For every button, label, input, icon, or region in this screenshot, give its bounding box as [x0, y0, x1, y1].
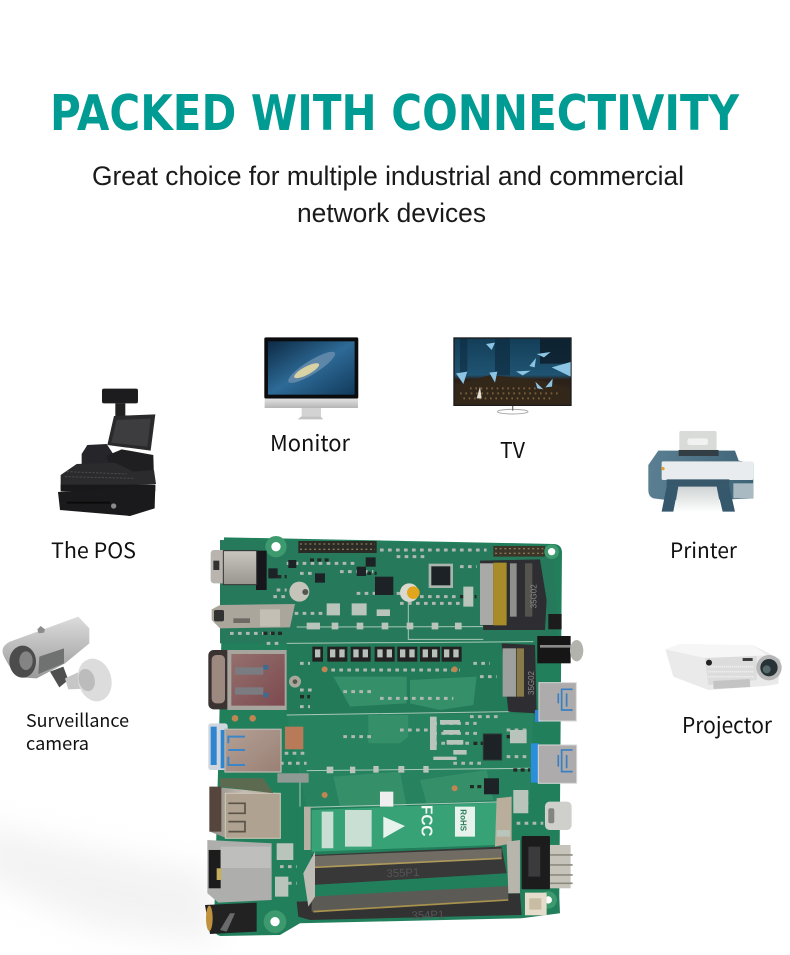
capacitor	[289, 582, 309, 602]
port: blue USB 3	[208, 723, 303, 772]
M.2 slot middle: 35G02	[527, 670, 536, 695]
motherboard	[205, 536, 583, 936]
port: top-left connector	[211, 550, 267, 590]
label: Surveillance camera: camera	[26, 730, 89, 756]
M.2 slot top: 35G02	[530, 584, 539, 608]
M.2 slot top	[480, 559, 547, 630]
device: projector	[665, 644, 782, 690]
SATA and fan connectors	[522, 836, 573, 915]
small components	[275, 587, 528, 897]
yellow LED	[400, 583, 420, 602]
device: TV	[453, 337, 572, 414]
label: Projector: Projector	[682, 708, 772, 740]
mounting holes	[264, 536, 559, 933]
middle PCB zone	[287, 642, 537, 717]
port: stacked HDMI and DisplayPort	[208, 650, 301, 710]
FCC mark: FCC	[418, 805, 435, 836]
RoHS mark	[455, 807, 475, 837]
RoHS mark: RoHS	[459, 809, 468, 832]
label: Monitor: Monitor	[270, 426, 350, 458]
right USB ports	[531, 683, 577, 783]
device: printer	[648, 431, 753, 513]
soft floor shadow	[0, 825, 215, 945]
DIMM slots	[297, 797, 522, 922]
USB-C port	[545, 802, 572, 830]
device: surveillance camera	[2, 617, 116, 705]
label: TV: TV	[500, 433, 525, 465]
port: RJ45	[207, 840, 272, 903]
subtitle: network devices	[297, 198, 486, 228]
label: Surveillance camera: Surveillance	[26, 707, 129, 733]
top PCB zone	[220, 540, 558, 643]
label: Printer: Printer	[670, 535, 738, 565]
green copper patches	[333, 677, 493, 807]
right audio connector	[537, 614, 583, 663]
row of chips	[312, 647, 462, 662]
certification panel	[312, 803, 497, 852]
device: monitor	[264, 337, 358, 419]
port: HDMI	[212, 604, 295, 628]
subtitle: Great choice for multiple industrial and commercial	[92, 161, 684, 191]
DIMM slots: 355P1	[386, 867, 420, 880]
heatsink pad grid	[277, 773, 309, 783]
QR code	[380, 792, 393, 807]
certification triangle	[383, 817, 405, 838]
label: The POS: The POS	[51, 535, 136, 565]
lower PCB zone	[287, 713, 533, 807]
copper highlights	[232, 666, 458, 798]
M.2 slot middle	[502, 643, 537, 713]
port: audio jack	[205, 903, 257, 934]
white traces	[287, 600, 533, 807]
subtitle	[92, 161, 684, 228]
board PCB	[214, 537, 562, 936]
ICs	[268, 557, 502, 794]
dark parts	[263, 560, 530, 787]
dense surface-mount parts	[230, 550, 543, 883]
white certification text blocks	[322, 810, 372, 848]
header pin blocks	[298, 541, 545, 557]
DIMM slots: 354P1	[411, 909, 444, 922]
label: Surveillance camera	[26, 707, 129, 756]
port: USB 2 stack	[209, 778, 280, 838]
device: POS terminal	[58, 389, 156, 516]
